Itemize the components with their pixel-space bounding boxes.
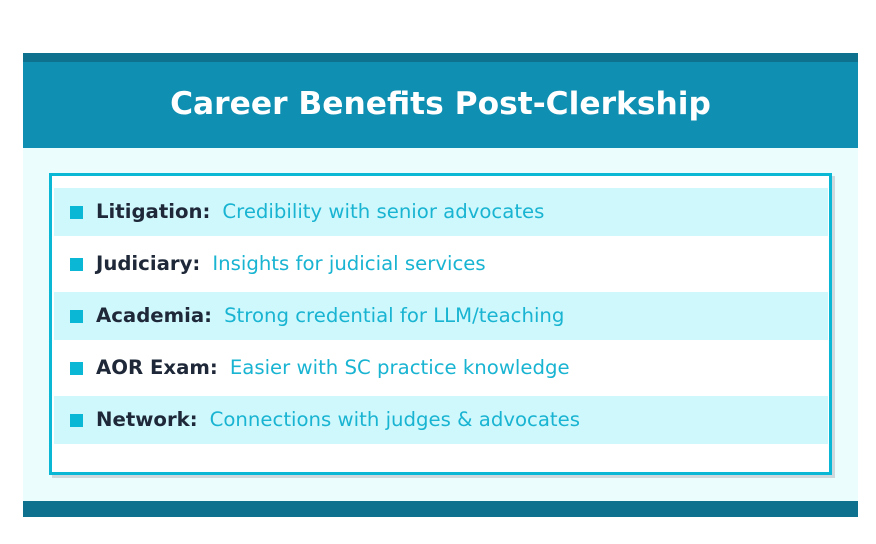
row: network: Network: bbox=[96, 408, 198, 430]
row: academia bbox=[54, 292, 828, 340]
row: network bbox=[54, 396, 828, 444]
row: academia: Academia: bbox=[96, 304, 212, 326]
row: judiciary: Insights for judicial services bbox=[212, 252, 486, 274]
row: judiciary bbox=[70, 252, 486, 274]
row: AOR exam: Easier with SC practice knowledge bbox=[230, 356, 570, 378]
row: judiciary: Judiciary: bbox=[96, 252, 200, 274]
title: Career Benefits Post-Clerkship bbox=[170, 86, 711, 122]
row: AOR exam bbox=[70, 356, 570, 378]
panel: benefits card bbox=[49, 173, 832, 475]
row: litigation: Litigation: bbox=[96, 200, 210, 222]
row: AOR exam: AOR Exam: bbox=[96, 356, 218, 378]
header band bbox=[23, 53, 858, 148]
footer band bbox=[23, 501, 858, 517]
row: litigation bbox=[54, 188, 828, 236]
row: academia: Strong credential for LLM/teaching bbox=[224, 304, 564, 326]
row: litigation: Credibility with senior advocates bbox=[222, 200, 544, 222]
row: network: Connections with judges & advocates bbox=[210, 408, 580, 430]
